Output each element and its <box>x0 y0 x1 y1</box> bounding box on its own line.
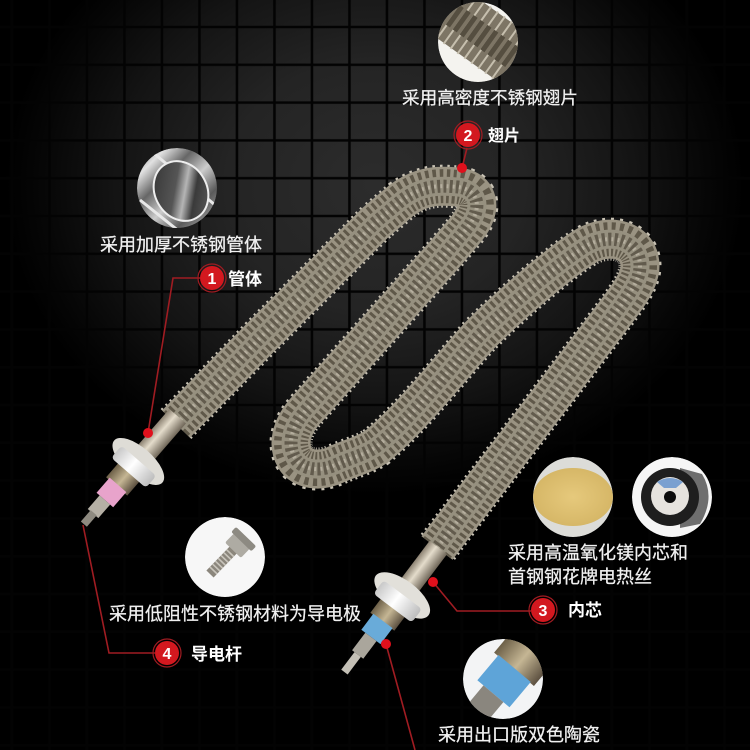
caption: core: 首钢钢花牌电热丝 <box>508 567 652 587</box>
icon: magnesium oxide powder <box>533 457 613 537</box>
icon: stainless bolt <box>185 517 265 597</box>
leader line 3 with dot <box>428 577 531 611</box>
badge 4 <box>153 639 181 667</box>
badge 2 <box>454 121 482 149</box>
caption: fins: 采用高密度不锈钢翅片 <box>402 88 578 108</box>
caption: tube: 采用加厚不锈钢管体 <box>100 235 262 255</box>
icon: fin detail <box>438 2 518 82</box>
icon: two-colour ceramic <box>463 639 543 719</box>
badge 2: 2 <box>464 128 473 145</box>
badge 4: 4 <box>163 646 172 663</box>
caption: core <box>508 543 688 587</box>
badge 3: 3 <box>539 603 548 620</box>
badge 3 <box>529 596 557 624</box>
icon: steel tube detail <box>137 148 219 232</box>
left terminal <box>60 395 202 545</box>
label: tube: 管体 <box>228 269 262 289</box>
label: core: 内芯 <box>568 601 602 620</box>
caption: core: 采用高温氧化镁内芯和 <box>508 543 688 563</box>
leader line 4 <box>83 525 155 653</box>
icon: heating wire spool <box>632 457 712 537</box>
finned heating tube <box>176 186 640 548</box>
label: conductive rod: 导电杆 <box>191 645 242 664</box>
label: fins: 翅片 <box>488 126 520 145</box>
leader line 2 with dot <box>457 148 467 173</box>
right terminal <box>318 528 465 692</box>
badge 1 <box>198 264 226 292</box>
caption: ceramic: 采用出口版双色陶瓷 <box>438 725 600 745</box>
leader line 1 with dot <box>143 278 200 438</box>
caption: conductive rod: 采用低阻性不锈钢材料为导电极 <box>109 604 361 624</box>
leader line 5 with dot <box>381 639 415 750</box>
badge 1: 1 <box>208 271 217 288</box>
